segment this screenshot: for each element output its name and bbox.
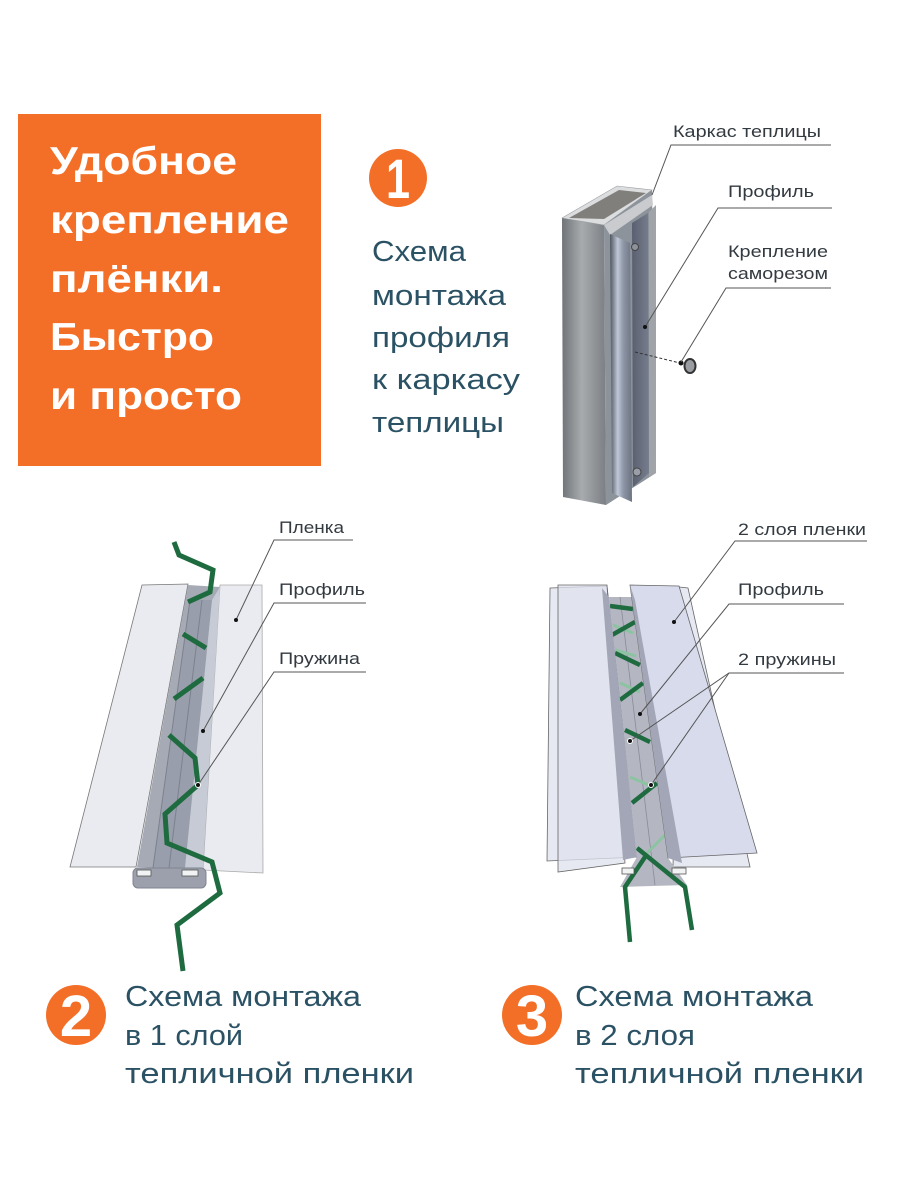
panel title text: Быстро [50, 316, 214, 359]
label: screw fastening [681, 242, 831, 362]
front film sheets [558, 585, 757, 874]
step 1 caption: теплицы [372, 407, 504, 439]
main spring [610, 606, 692, 942]
label: profile: Профиль [279, 580, 365, 599]
panel title text: крепление [50, 199, 289, 242]
step 3 number badge: 3 [516, 984, 548, 1049]
label: profile: Профиль [728, 182, 814, 201]
screw [635, 352, 696, 373]
label: spring [196, 649, 366, 788]
label: profile [638, 580, 844, 716]
label: film [234, 518, 353, 622]
label: spring: Пружина [279, 649, 361, 668]
aluminium profile [133, 585, 220, 888]
panel title text: плёнки. [50, 258, 223, 301]
label: profile [201, 580, 366, 733]
back film sheets [547, 586, 750, 867]
step 3 caption: Схема монтажа [575, 981, 814, 1013]
label: two springs [628, 650, 844, 788]
step 2 caption [125, 981, 414, 1090]
step 1 caption: к каркасу [372, 364, 521, 396]
diagram 1: profile on greenhouse frame [562, 122, 832, 505]
column body [562, 186, 656, 505]
label: screw fastening: Крепление [728, 242, 828, 261]
step 1 caption: монтажа [372, 280, 507, 312]
label: two layers of film [672, 520, 867, 624]
diagram 2: single film layer [70, 518, 366, 971]
step 3 caption: тепличной пленки [575, 1058, 864, 1090]
label: frame [652, 122, 831, 195]
step 2 number badge: 2 [60, 984, 92, 1049]
step 2 caption: тепличной пленки [125, 1058, 414, 1090]
step 3 number badge [502, 984, 562, 1049]
green spring [165, 542, 220, 971]
label: screw fastening: саморезом [728, 264, 828, 283]
film sheets [70, 584, 263, 873]
step 1 caption: профиля [372, 322, 510, 354]
panel title text: Удобное [50, 140, 237, 183]
step 2 caption: Схема монтажа [125, 981, 362, 1013]
step 1 number badge [369, 147, 427, 210]
step 1 number badge: 1 [386, 147, 410, 210]
step 2 number badge [46, 984, 106, 1049]
label: frame: Каркас теплицы [673, 122, 821, 141]
step 3 caption: в 2 слоя [575, 1020, 695, 1052]
panel title text [50, 140, 289, 418]
orange title panel [18, 114, 321, 466]
label: two layers of film: 2 слоя пленки [738, 520, 866, 539]
label: profile [643, 182, 832, 329]
label: two springs: 2 пружины [738, 650, 836, 669]
profile channel [609, 597, 687, 887]
step 1 caption [372, 236, 521, 439]
second spring, light [613, 625, 665, 853]
diagram 3: two film layers [547, 520, 867, 942]
label: profile: Профиль [738, 580, 824, 599]
step 2 caption: в 1 слой [125, 1020, 243, 1052]
step 1 caption: Схема [372, 236, 467, 268]
label: film: Пленка [279, 518, 345, 537]
panel title text: и просто [50, 375, 242, 418]
step 3 caption [575, 981, 864, 1090]
